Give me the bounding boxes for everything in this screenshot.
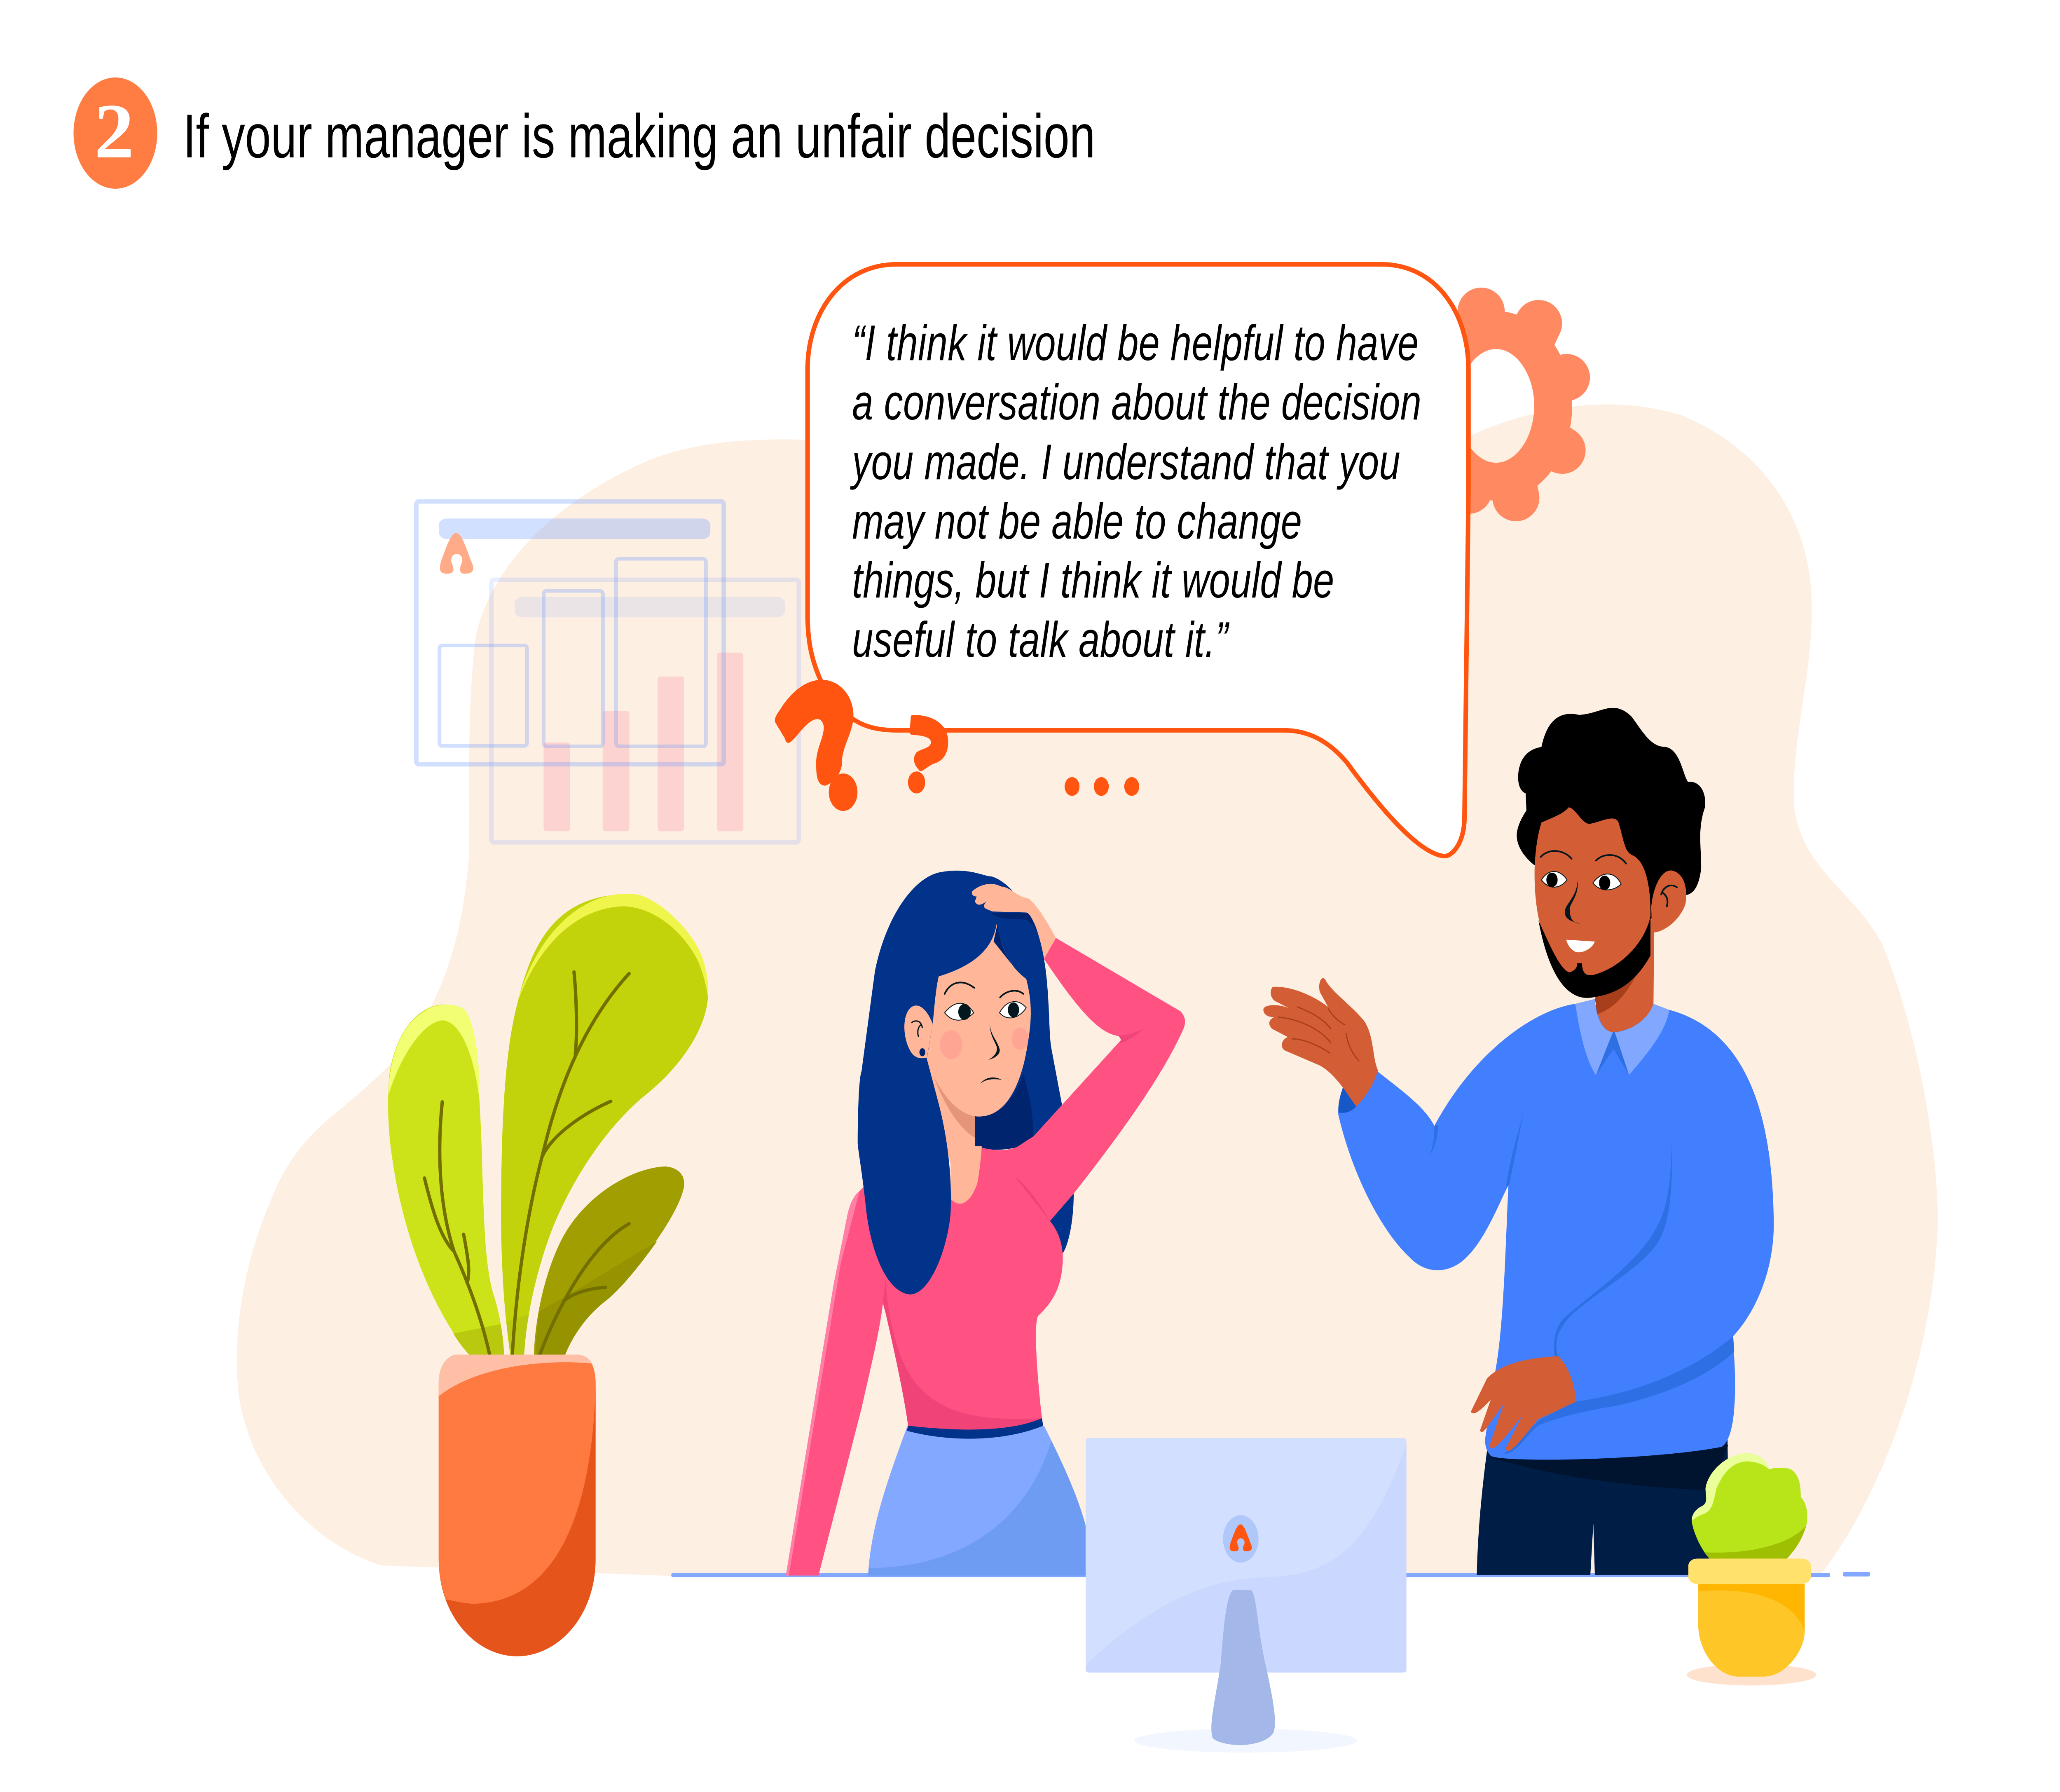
belt <box>907 1418 1043 1439</box>
table line <box>671 1572 1870 1577</box>
torso <box>864 1136 1074 1436</box>
face <box>925 921 1031 1117</box>
monitor stand <box>1211 1590 1275 1745</box>
front hair <box>858 871 1044 1295</box>
step number badge: 2 <box>94 88 134 175</box>
neck <box>1595 913 1654 1032</box>
icon: question marks and ellipsis dots <box>775 680 1139 811</box>
left sleeve <box>786 1186 894 1576</box>
left leaf <box>388 1005 504 1355</box>
man facial features <box>1541 851 1626 952</box>
woman facial features <box>940 982 1028 1084</box>
quote text <box>850 314 1421 668</box>
middle leaf <box>501 894 708 1355</box>
chart header bar back <box>515 597 785 617</box>
trousers <box>1477 1439 1730 1575</box>
yellow pot <box>1688 1558 1811 1677</box>
monitor and small plant <box>1086 1438 1816 1752</box>
background blob <box>237 405 1938 1576</box>
small pot shadow <box>1687 1664 1816 1686</box>
large potted plant <box>388 894 708 1656</box>
woman <box>786 871 1185 1576</box>
sweater <box>1338 1004 1774 1460</box>
heading: If your manager is making an unfair decision <box>183 102 1095 171</box>
raised arm <box>1013 938 1185 1221</box>
speech bubble <box>808 265 1468 856</box>
leaf veins <box>424 972 629 1355</box>
beard <box>1538 916 1650 998</box>
icon: logo mark <box>440 533 473 574</box>
bar chart columns <box>543 653 743 831</box>
chart window back <box>492 580 799 842</box>
quote text: may not be able to change <box>852 493 1302 549</box>
dark leaf <box>534 1167 684 1355</box>
monitor screen <box>1086 1438 1407 1673</box>
small bush <box>1692 1453 1807 1558</box>
hand on head <box>972 884 1056 959</box>
collar <box>1575 999 1669 1075</box>
raised hand <box>1263 978 1378 1113</box>
quote text: “I think it would be helpful to have <box>852 314 1419 371</box>
chart window front <box>416 501 724 764</box>
arm hand on waist <box>1471 1356 1576 1451</box>
man <box>1263 708 1774 1575</box>
quote text: useful to talk about it.” <box>852 611 1229 668</box>
back hair <box>975 907 1074 1253</box>
shadow hair under chin <box>975 1074 1033 1150</box>
face <box>1535 807 1650 995</box>
step number badge <box>73 77 157 189</box>
quote text: you made. I understand that you <box>850 433 1400 490</box>
hair <box>1517 708 1705 919</box>
ear <box>904 1005 933 1058</box>
chart header bar front <box>439 518 710 539</box>
icon: monitor logo <box>1223 1515 1259 1562</box>
dashboard charts <box>416 501 799 842</box>
quote text: a conversation about the decision <box>852 374 1421 430</box>
small panel boxes <box>440 559 706 746</box>
ear <box>1651 870 1686 943</box>
orange pot <box>439 1354 596 1656</box>
skirt <box>868 1426 1086 1576</box>
neck <box>921 1044 982 1204</box>
stand shadow <box>1134 1729 1357 1752</box>
icon: gear <box>1439 311 1566 498</box>
quote text: things, but I think it would be <box>852 552 1334 608</box>
